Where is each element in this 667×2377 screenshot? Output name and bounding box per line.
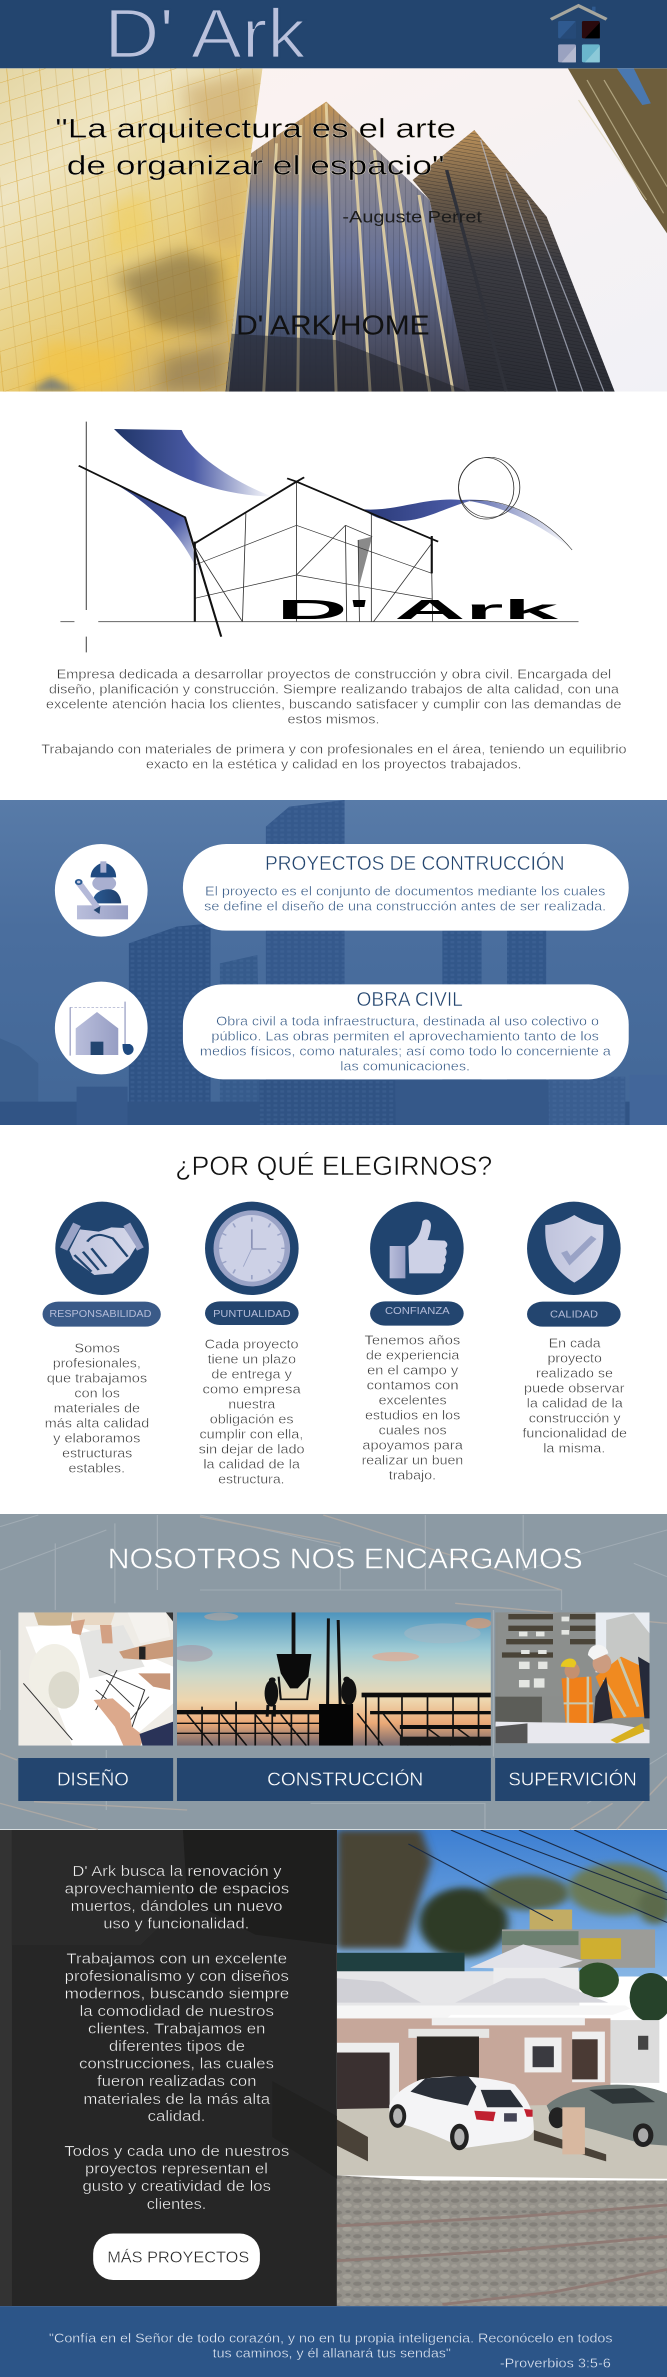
photo: house with cars (337, 1830, 667, 2306)
panel: obra civil: público. Las obras permiten el aprovechamiento tanto de los (211, 1029, 599, 1044)
description: Cada proyecto (205, 1338, 299, 1352)
label pill: CONFIANZA (385, 1304, 450, 1317)
dark text panel: gusto y creatividad de los (83, 2178, 271, 2195)
circle icon: worker with plan (55, 844, 148, 937)
logo drawing: D' Ark (276, 594, 559, 625)
description: realizado se (536, 1367, 613, 1381)
dark text panel: muertos, dándoles un nuevo (71, 1897, 282, 1915)
description: estudios en los (365, 1409, 460, 1423)
header band (0, 0, 667, 72)
label: diseno: DISEÑO (57, 1768, 129, 1790)
panel: obra civil: Obra civil a toda infraestructura, destinada al uso colectivo o (216, 1014, 599, 1029)
description (199, 1338, 305, 1487)
description: estructura. (218, 1473, 285, 1487)
footer band (0, 2306, 667, 2377)
breadcrumb: D' ARK/HOME (236, 309, 430, 340)
icon: thumbs up (370, 1202, 464, 1295)
label: diseno (18, 1758, 173, 1801)
dark text panel: Trabajamos con un excelente (66, 1950, 287, 1967)
description: En cada (549, 1337, 601, 1351)
heading: ¿POR QUÉ ELEGIRNOS? (175, 1151, 492, 1181)
photo: construction silhouette (170, 1612, 491, 1746)
dark text panel: D' Ark busca la renovación y (72, 1863, 282, 1880)
description: puede observar (524, 1382, 624, 1396)
description: profesionales, (53, 1357, 141, 1371)
description: que trabajamos (47, 1372, 147, 1386)
services we handle section (0, 1514, 667, 1829)
description (45, 1342, 149, 1476)
icon: house logo (551, 6, 607, 62)
services section (0, 800, 667, 1125)
description: obligación es (210, 1413, 294, 1427)
about text (41, 668, 627, 772)
about text: exacto en la estética y calidad en los proyectos trabajados. (146, 758, 522, 772)
panel: obra civil: las comunicaciones. (340, 1059, 470, 1074)
circle icon: house with plumb line (55, 982, 148, 1074)
about text: estos mismos. (288, 713, 379, 727)
dark text panel (0, 1830, 337, 2306)
dark text panel: modernos, buscando siempre (65, 1985, 289, 2002)
icon: shield (527, 1202, 621, 1295)
description: apoyamos para (362, 1439, 464, 1453)
description (362, 1334, 464, 1483)
column: confianza (362, 1202, 464, 1483)
dark text panel: proyectos representan el (85, 2160, 268, 2177)
description: en el campo y (367, 1364, 459, 1378)
label pill: PUNTUALIDAD (213, 1307, 291, 1320)
dark text panel: fueron realizadas con (97, 2073, 257, 2090)
panel: obra civil: OBRA CIVIL (356, 988, 463, 1010)
hero photo with quote (0, 68, 667, 392)
label: supervicion (495, 1758, 650, 1801)
quote: "La arquitectura es el arte (55, 114, 456, 144)
panel: proyectos de construccion: El proyecto es el conjunto de documentos mediante los cuales (205, 884, 606, 899)
description: la calidad de la (203, 1458, 301, 1472)
column: calidad (522, 1202, 627, 1456)
panel: proyectos de construccion: se define el diseño de una construcción antes de ser realizada. (204, 899, 606, 914)
column: puntualidad (199, 1202, 305, 1487)
label pill (205, 1301, 299, 1325)
description: construcción y (529, 1412, 621, 1426)
description: cumplir con ella, (200, 1428, 303, 1442)
photo: site supervision (495, 1612, 650, 1743)
description: excelentes (379, 1394, 447, 1408)
icon: handshake (55, 1202, 149, 1295)
footer band: -Proverbios 3:5-6 (500, 2357, 611, 2371)
photo: skyscrapers (0, 68, 667, 392)
dark text panel: clientes. (147, 2195, 206, 2212)
icon: clock (205, 1202, 299, 1295)
panel: proyectos de construccion: PROYECTOS DE CONTRUCCIÓN (265, 852, 564, 874)
description: cuales nos (379, 1424, 447, 1438)
label: construccion (177, 1758, 491, 1801)
dark text panel: aprovechamiento de espacios (65, 1880, 289, 1897)
description: estructuras (62, 1447, 132, 1461)
label pill (370, 1301, 464, 1326)
footer band: "Confía en el Señor de todo corazón, y no en tu propia inteligencia. Reconócelo en todos (49, 2332, 613, 2346)
about section (41, 422, 627, 772)
photo: blueprint design (18, 1612, 173, 1746)
description: la misma. (543, 1442, 605, 1456)
footer band: tus caminos, y él allanará tus sendas" (213, 2347, 451, 2361)
description: como empresa (202, 1383, 301, 1397)
description: tiene un plazo (208, 1353, 296, 1367)
dark text panel: clientes. Trabajamos en (88, 2020, 265, 2037)
description: con los (74, 1387, 120, 1401)
quote author: -Auguste Perret (342, 209, 483, 227)
dark text panel: profesionalismo y con diseños (65, 1968, 289, 1985)
description: de experiencia (366, 1349, 460, 1363)
label pill (43, 1302, 161, 1327)
column: responsabilidad (43, 1202, 161, 1476)
description: contamos con (367, 1379, 459, 1393)
description: Somos (74, 1342, 120, 1356)
logo drawing (60, 422, 579, 652)
why choose us section (43, 1151, 627, 1487)
label pill: RESPONSABILIDAD (49, 1307, 151, 1320)
description: estables. (68, 1462, 125, 1476)
description: sin dejar de lado (199, 1443, 305, 1457)
label: supervicion: SUPERVICIÓN (508, 1768, 637, 1790)
dark text panel: diferentes tipos de (109, 2038, 245, 2055)
dark text panel: Todos y cada uno de nuestros (64, 2143, 289, 2160)
background: blue skyline (0, 800, 667, 1125)
description: proyecto (547, 1352, 602, 1366)
description: funcionalidad de (522, 1427, 627, 1441)
description: de entrega y (211, 1368, 292, 1382)
dark text panel: materiales de la más alta (83, 2090, 271, 2107)
panel: proyectos de construccion (183, 844, 629, 931)
button: mas proyectos: MÁS PROYECTOS (107, 2248, 249, 2266)
description: la calidad de la (527, 1397, 623, 1411)
dark text panel: uso y funcionalidad. (103, 1915, 249, 1932)
dark text panel: la comodidad de nuestros (80, 2002, 274, 2019)
description: nuestra (228, 1398, 276, 1412)
description: materiales de (54, 1402, 140, 1416)
label pill (527, 1302, 621, 1327)
label: construccion: CONSTRUCCIÓN (267, 1768, 423, 1790)
button: mas proyectos (93, 2234, 260, 2280)
projects section (0, 1830, 667, 2377)
label pill: CALIDAD (550, 1308, 598, 1320)
dark text panel: construcciones, las cuales (79, 2055, 274, 2072)
description: realizar un buen (362, 1454, 463, 1468)
description (522, 1337, 627, 1456)
quote (55, 114, 456, 180)
panel: obra civil (183, 984, 629, 1079)
description: más alta calidad (45, 1417, 149, 1431)
description: y elaboramos (53, 1432, 140, 1446)
description: Tenemos años (365, 1334, 460, 1348)
description: trabajo. (389, 1469, 436, 1483)
dark text panel: calidad. (148, 2107, 205, 2124)
quote: de organizar el espacio" (67, 151, 445, 180)
